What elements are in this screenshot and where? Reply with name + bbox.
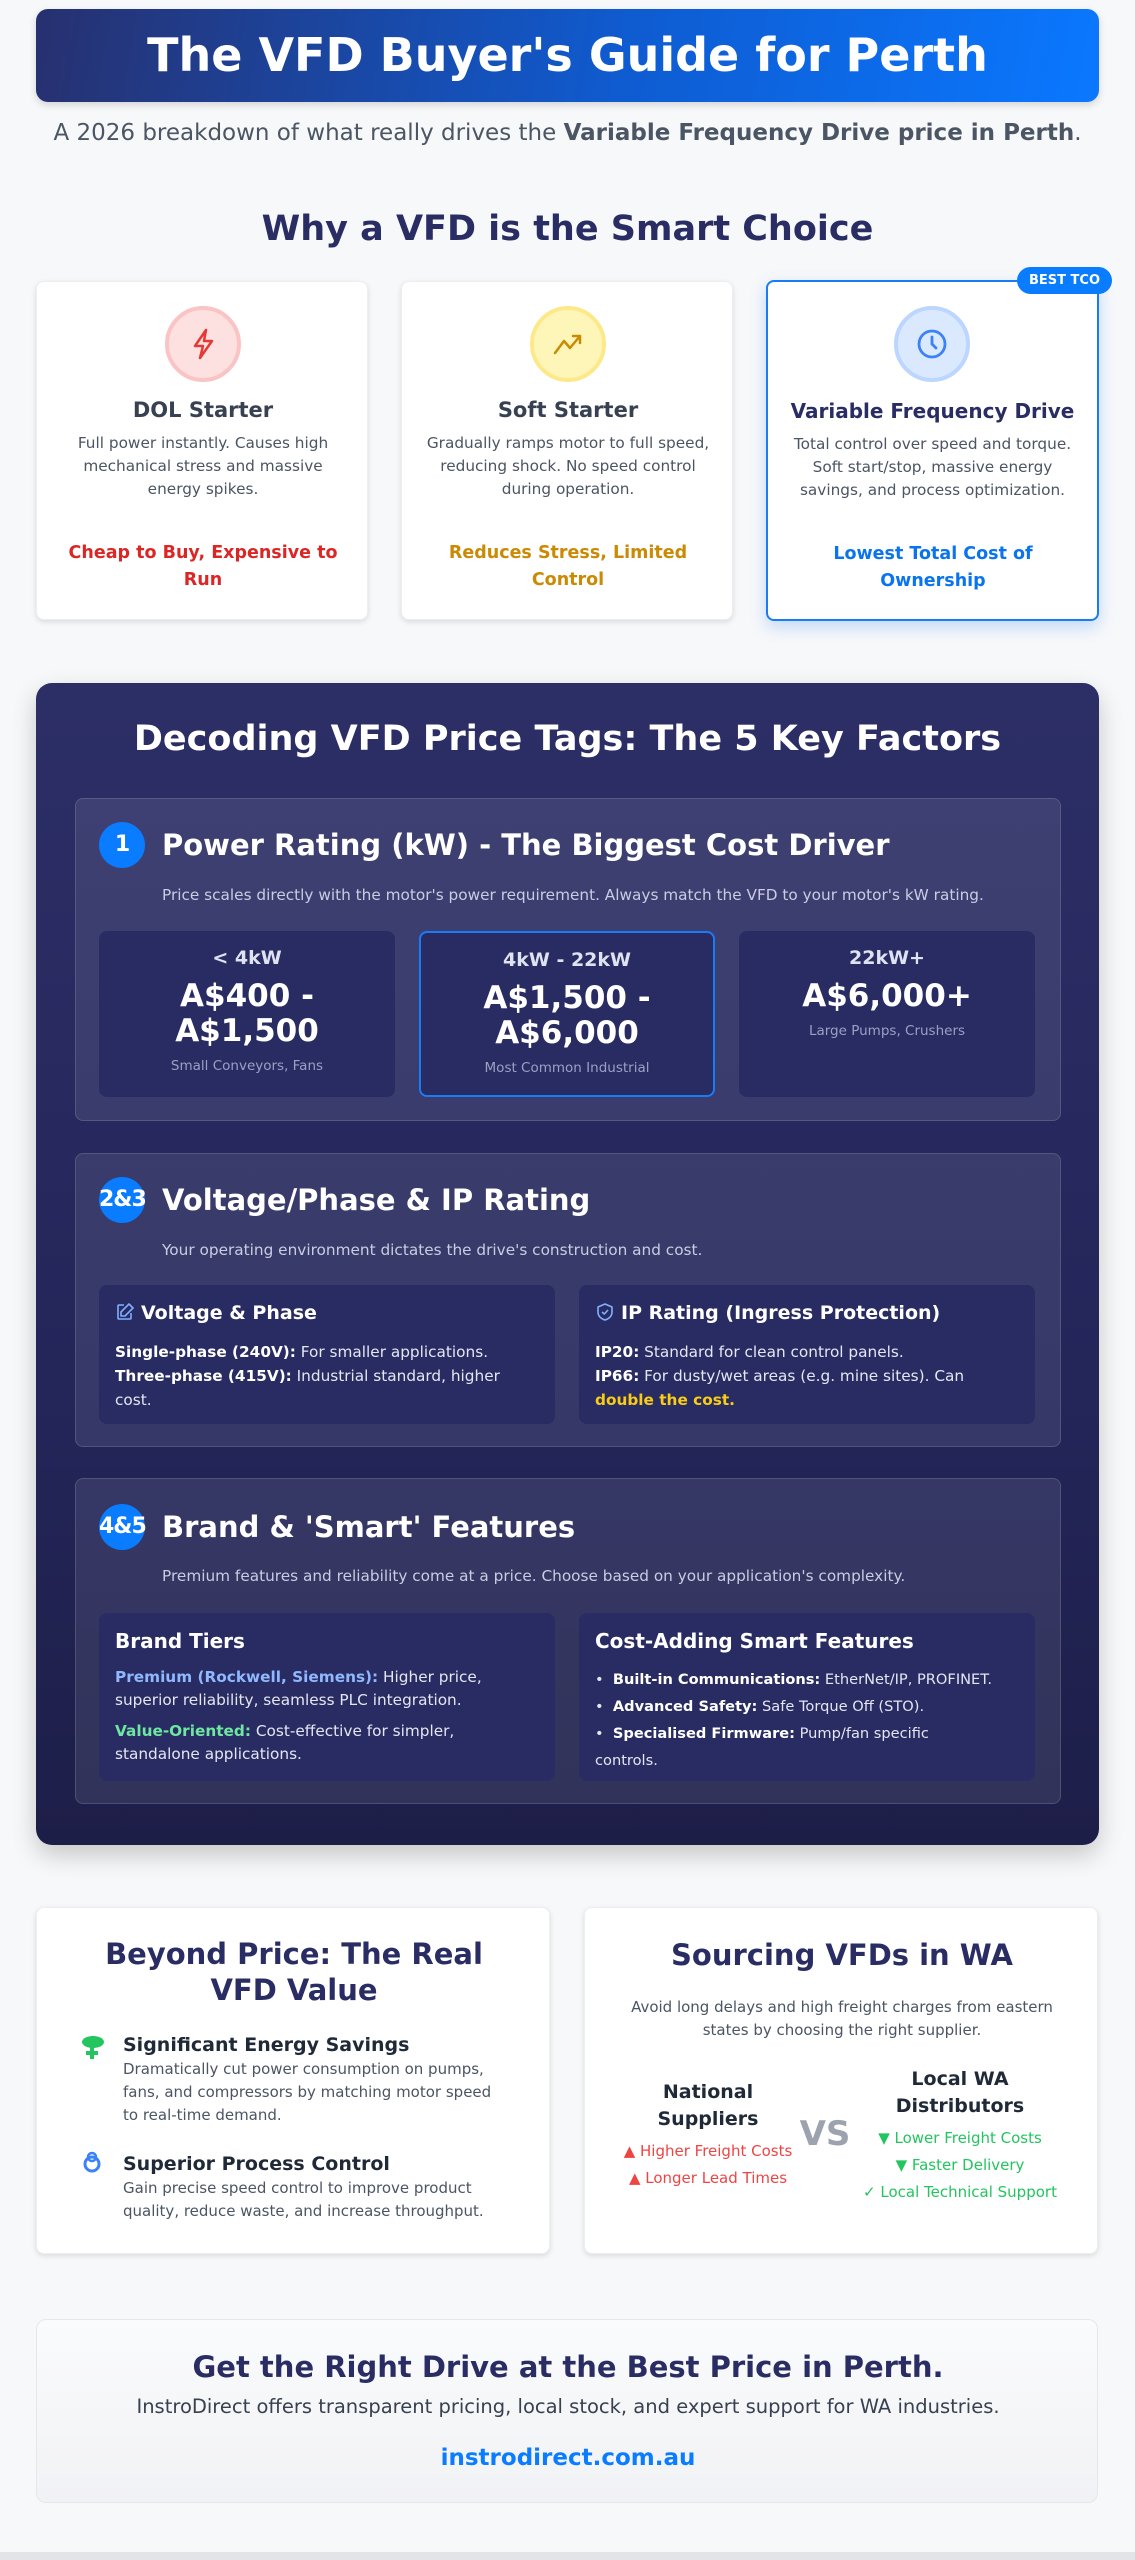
box: smart features	[579, 1613, 1035, 1781]
number badge: 2&3	[99, 1187, 146, 1212]
verdict: Lowest Total Cost of Ownership	[833, 544, 1033, 591]
column: local WA distributors: ▼ Faster Delivery	[896, 2156, 1024, 2174]
card: DOL starter	[36, 281, 368, 620]
price tier: large: 22kW+	[849, 947, 925, 969]
verdict: Cheap to Buy, Expensive to Run	[69, 543, 337, 590]
icon: process control	[84, 2152, 100, 2172]
factor heading: Brand & 'Smart' Features	[162, 1510, 575, 1544]
panel: decoding price factors	[36, 683, 1099, 1845]
factor heading: Voltage/Phase & IP Rating	[162, 1183, 590, 1217]
price tier: small: A$1,500	[175, 1013, 319, 1049]
column: national suppliers: Suppliers	[657, 2108, 758, 2130]
box: IP rating: IP66: For dusty/wet areas (e.g. mine sites). Can double the cost.	[595, 1367, 964, 1409]
price tier: medium (highlighted): Most Common Industrial	[485, 1060, 649, 1076]
factor description: Premium features and reliability come at a price. Choose based on your application's complexity.	[162, 1567, 905, 1585]
price tier: large	[739, 931, 1035, 1097]
heading: why a VFD: Why a VFD is the Smart Choice	[262, 209, 873, 249]
factor heading: Power Rating (kW) - The Biggest Cost Driver	[162, 828, 890, 862]
box: brand tiers: Brand Tiers	[115, 1629, 245, 1653]
box: brand tiers: Value-Oriented: Cost-effective for simpler, standalone applications.	[115, 1722, 454, 1763]
number badge: 1	[115, 832, 129, 857]
column: national suppliers: ▲ Higher Freight Costs	[624, 2142, 792, 2160]
factor 1: power rating	[75, 798, 1061, 1121]
factor description: Price scales directly with the motor's power requirement. Always match the VFD to your motor's kW rating.	[162, 886, 984, 904]
column: national suppliers: National	[663, 2081, 753, 2103]
price tier: small: A$400 -	[180, 978, 314, 1014]
column: national suppliers	[624, 2081, 792, 2187]
description: Avoid long delays and high freight charges from eastern states by choosing the right supplier.	[631, 1998, 1053, 2039]
box: voltage & phase: Three-phase (415V): Industrial standard, higher cost.	[115, 1367, 500, 1409]
title: Variable Frequency Drive	[791, 399, 1074, 423]
factor 2&3: voltage and IP	[75, 1153, 1061, 1447]
verdict: Reduces Stress, Limited Control	[449, 543, 687, 590]
box: brand tiers: Premium (Rockwell, Siemens): Higher price, superior reliability, seamless PLC integration.	[115, 1668, 482, 1709]
heading: Beyond Price: The Real VFD Value	[105, 1937, 483, 2007]
price tier: medium (highlighted)	[419, 931, 715, 1097]
box: voltage & phase: Single-phase (240V): For smaller applications.	[115, 1343, 488, 1361]
icon: lightning	[165, 306, 241, 382]
box: smart features: • Built-in Communications: EtherNet/IP, PROFINET.	[595, 1671, 992, 1688]
box: IP rating: IP20: Standard for clean control panels.	[595, 1343, 904, 1361]
panel: sourcing in WA	[584, 1907, 1098, 2254]
column: local WA distributors: Distributors	[896, 2095, 1024, 2117]
icon: energy	[82, 2036, 104, 2059]
number badge	[99, 822, 145, 868]
icon: trending up	[530, 306, 606, 382]
price tier: small: < 4kW	[212, 947, 282, 969]
card: soft starter	[401, 281, 733, 620]
panel: beyond price	[36, 1907, 550, 2254]
box: voltage & phase	[99, 1285, 555, 1424]
CTA heading: Get the Right Drive at the Best Price in Perth.	[192, 2350, 944, 2384]
badge: best TCO: BEST TCO	[1029, 273, 1100, 288]
column: local WA distributors: ✓ Local Technical Support	[863, 2183, 1057, 2201]
title: DOL Starter	[133, 398, 273, 422]
price tier: medium (highlighted): A$1,500 -	[483, 980, 651, 1016]
box: smart features: • Specialised Firmware: Pump/fan specific	[595, 1725, 929, 1742]
column: national suppliers: ▲ Longer Lead Times	[629, 2169, 787, 2187]
column: local WA distributors	[863, 2068, 1057, 2201]
badge: best TCO	[1017, 267, 1112, 294]
icon + heading: Voltage & Phase	[141, 1302, 317, 1324]
panel heading: Decoding VFD Price Tags: The 5 Key Factors	[134, 719, 1001, 759]
card: VFD (highlighted)	[766, 280, 1099, 621]
CTA text: InstroDirect offers transparent pricing, local stock, and expert support for WA industries.	[136, 2395, 1000, 2418]
column: local WA distributors: Local WA	[911, 2068, 1009, 2090]
price tier: small: Small Conveyors, Fans	[171, 1058, 323, 1074]
price tier: large: A$6,000+	[802, 978, 972, 1014]
header banner: The VFD Buyer's Guide for Perth	[147, 28, 988, 82]
item: process control	[123, 2153, 484, 2220]
number badge	[99, 1177, 145, 1223]
heading: Sourcing VFDs in WA	[671, 1938, 1013, 1972]
price tier: medium (highlighted): A$6,000	[495, 1015, 639, 1051]
box: smart features: • Advanced Safety: Safe Torque Off (STO).	[595, 1698, 924, 1715]
title: Soft Starter	[498, 398, 638, 422]
call to action	[36, 2319, 1098, 2503]
box: IP rating	[579, 1285, 1035, 1424]
description: Total control over speed and torque. Soft start/stop, massive energy savings, and process optimization.	[794, 435, 1071, 499]
item: process control: Gain precise speed control to improve product quality, reduce waste, and increase throughput.	[123, 2179, 484, 2220]
description: Full power instantly. Causes high mechanical stress and massive energy spikes.	[78, 434, 328, 498]
box: brand tiers	[99, 1613, 555, 1781]
header banner	[36, 9, 1099, 102]
description: Gradually ramps motor to full speed, reducing shock. No speed control during operation.	[427, 434, 709, 498]
subtitle: A 2026 breakdown of what really drives the Variable Frequency Drive price in Perth.	[53, 120, 1082, 146]
CTA link: instrodirect.com.au	[441, 2445, 695, 2471]
number badge: 4&5	[99, 1514, 146, 1539]
factor 4&5: brand & smart features	[75, 1478, 1061, 1804]
number badge	[99, 1504, 145, 1550]
price tier: small	[99, 931, 395, 1097]
icon + heading: IP Rating (Ingress Protection)	[621, 1302, 940, 1324]
icon: clock	[894, 306, 970, 382]
column: local WA distributors: ▼ Lower Freight Costs	[878, 2129, 1042, 2147]
box: smart features: controls.	[595, 1752, 658, 1769]
item: energy savings: Significant Energy Savings	[123, 2034, 409, 2056]
item: energy savings: Dramatically cut power consumption on pumps, fans, and compressors by matching motor speed to real-time demand.	[123, 2060, 491, 2124]
box: smart features: Cost-Adding Smart Features	[595, 1629, 914, 1653]
VS label: VS	[800, 2114, 850, 2154]
item: process control: Superior Process Control	[123, 2153, 390, 2175]
price tier: large: Large Pumps, Crushers	[809, 1023, 965, 1039]
price tier: medium (highlighted): 4kW - 22kW	[503, 949, 631, 971]
factor description: Your operating environment dictates the drive's construction and cost.	[162, 1241, 702, 1259]
